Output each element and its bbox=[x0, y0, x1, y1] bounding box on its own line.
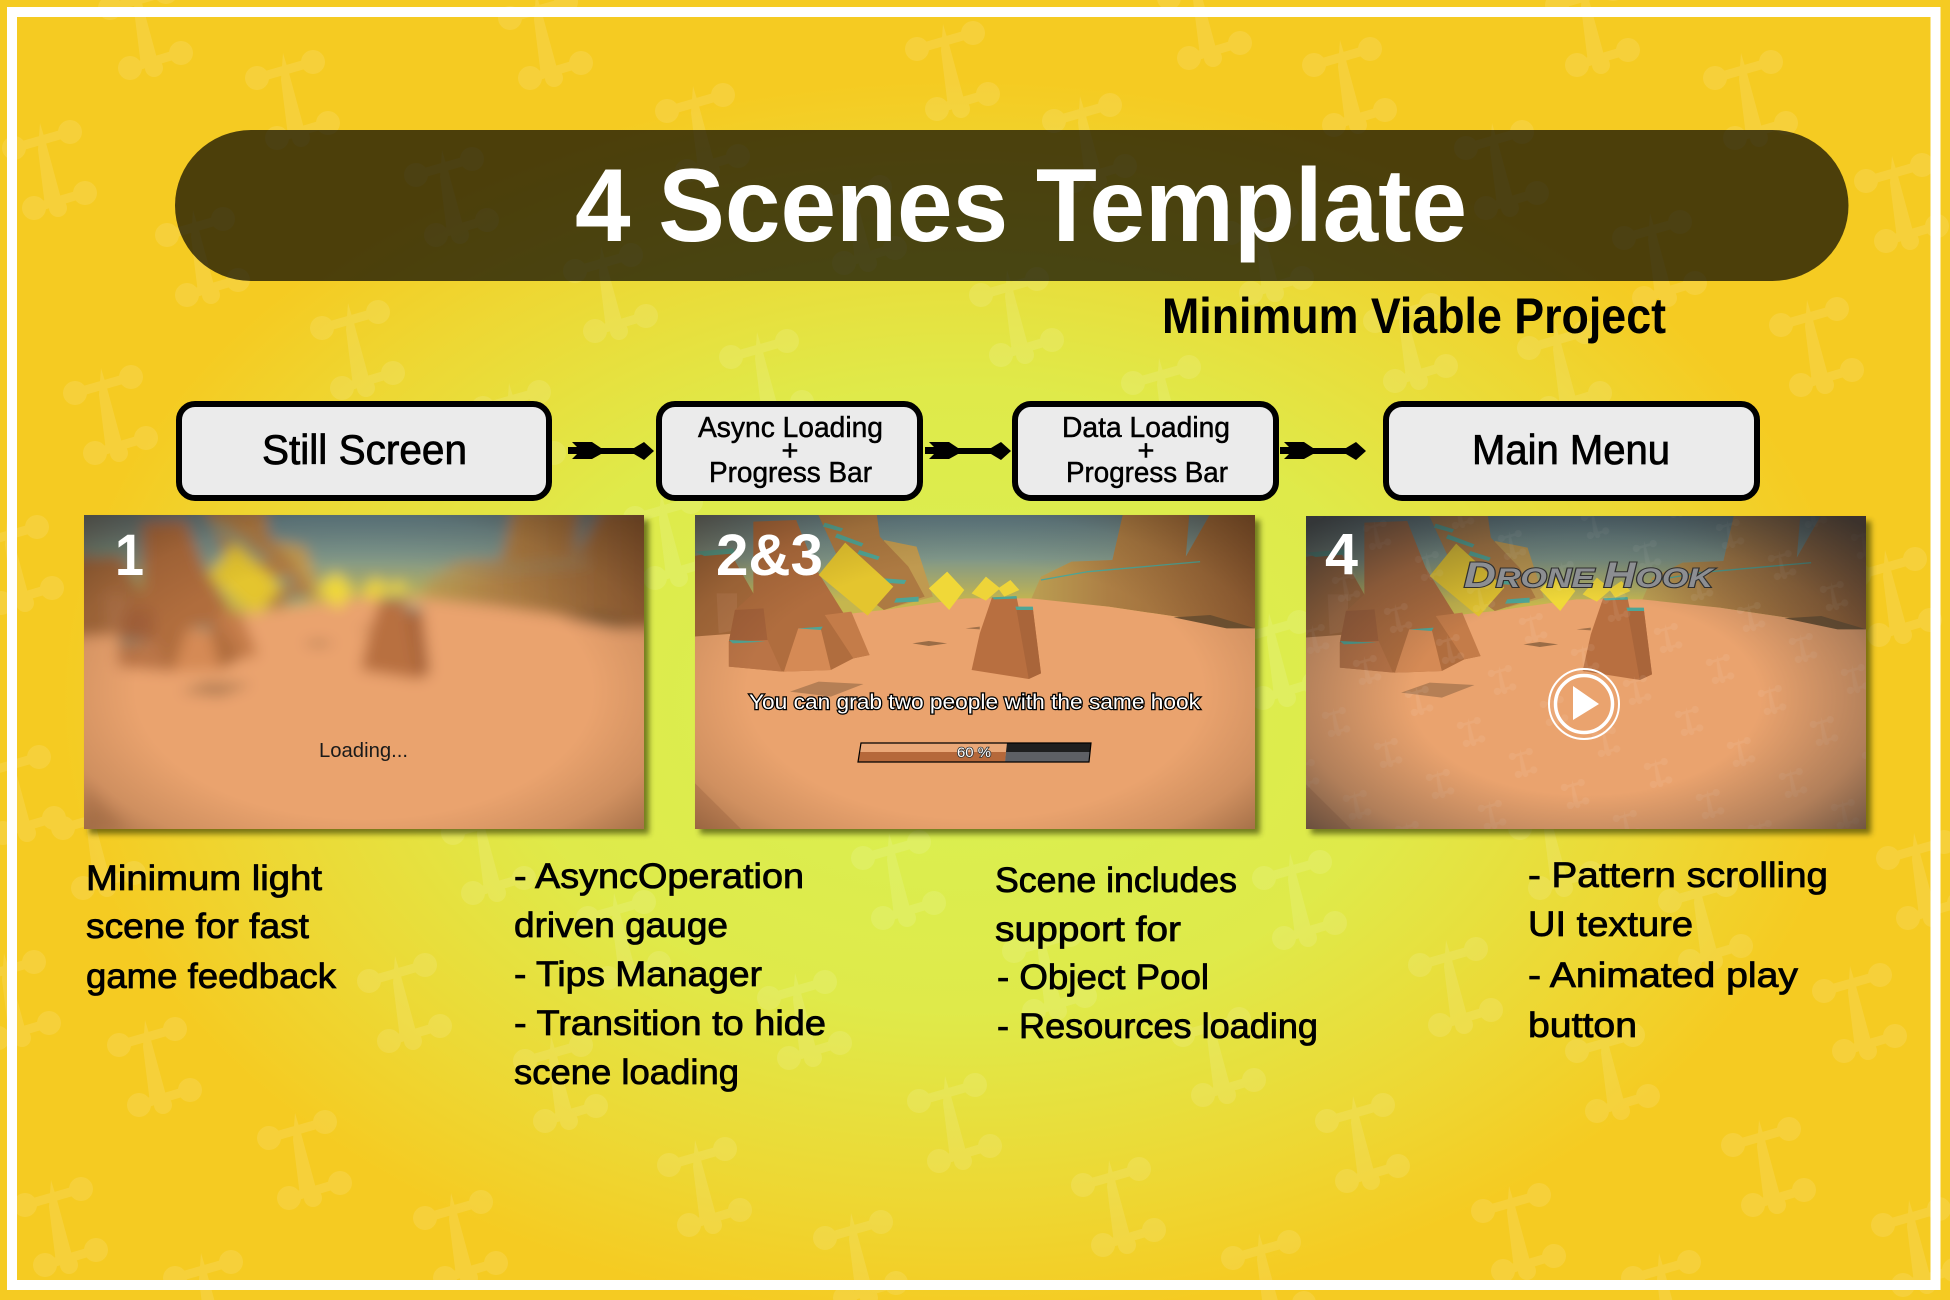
text block: scene 3 description: Scene includes bbox=[995, 861, 1237, 900]
step box: Async Loading + Progress Bar: Progress Bar bbox=[709, 457, 872, 489]
arrow 1 bbox=[568, 442, 654, 460]
title: 4 Scenes Template bbox=[575, 148, 1467, 264]
text block: scene 3 description: - Resources loading bbox=[997, 1007, 1318, 1046]
text block: scene 2 description bbox=[514, 857, 826, 1092]
text block: scene 1 description bbox=[86, 859, 337, 996]
arrow 3 bbox=[1280, 442, 1366, 460]
loading label: Loading... bbox=[319, 740, 408, 762]
panel: screenshot 1 still screen bbox=[84, 515, 653, 838]
step box: Async Loading + Progress Bar: Async Loading bbox=[698, 412, 883, 444]
text block: scene 3 description: - Object Pool bbox=[997, 958, 1209, 997]
text block: scene 2 description: - AsyncOperation bbox=[514, 857, 804, 896]
text block: scene 2 description: driven gauge bbox=[514, 906, 728, 945]
text block: scene 2 description: scene loading bbox=[514, 1053, 739, 1092]
title banner bbox=[175, 130, 1848, 281]
text block: scene 4 description: - Pattern scrolling bbox=[1528, 856, 1828, 895]
scene number 4: 4 bbox=[1325, 522, 1358, 587]
step box: Async Loading + Progress Bar bbox=[659, 404, 920, 498]
text block: scene 4 description: UI texture bbox=[1528, 905, 1693, 944]
step box: Data Loading + Progress Bar: Data Loading bbox=[1062, 412, 1230, 444]
text block: scene 2 description: - Tips Manager bbox=[514, 955, 762, 994]
icon: play button bbox=[1549, 669, 1619, 739]
tip text: You can grab two people with the same hook bbox=[749, 691, 1201, 714]
step box: Still Screen: Still Screen bbox=[262, 426, 467, 473]
progress bar: 60 % bbox=[957, 744, 991, 760]
step box: Data Loading + Progress Bar bbox=[1015, 404, 1276, 498]
text block: scene 4 description: - Animated play bbox=[1528, 956, 1799, 995]
scene number 1: 1 bbox=[115, 523, 144, 588]
text block: scene 1 description: game feedback bbox=[86, 957, 337, 996]
progress bar bbox=[858, 743, 1091, 762]
step box: Main Menu: Main Menu bbox=[1472, 426, 1670, 473]
text block: scene 3 description bbox=[995, 861, 1318, 1046]
panel: screenshot 4 main menu bbox=[1306, 516, 1876, 838]
step box: Main Menu bbox=[1386, 404, 1757, 498]
scene number 2&3: 2&3 bbox=[716, 523, 823, 588]
text block: scene 4 description: button bbox=[1528, 1006, 1637, 1045]
subtitle: Minimum Viable Project bbox=[1162, 288, 1666, 344]
step box: Data Loading + Progress Bar: Progress Bar bbox=[1066, 457, 1228, 489]
panel: screenshot 2 and 3 loading bbox=[695, 515, 1264, 838]
text block: scene 4 description bbox=[1528, 856, 1828, 1045]
step box: Data Loading + Progress Bar: + bbox=[1138, 435, 1154, 467]
game logo: DRONE HOOK bbox=[1464, 556, 1716, 595]
text block: scene 3 description: support for bbox=[995, 910, 1181, 949]
arrow 2 bbox=[925, 442, 1011, 460]
text block: scene 1 description: scene for fast bbox=[86, 907, 309, 946]
text block: scene 2 description: - Transition to hide bbox=[514, 1004, 826, 1043]
text block: scene 1 description: Minimum light bbox=[86, 859, 322, 898]
step box: Still Screen bbox=[179, 404, 549, 498]
step box: Async Loading + Progress Bar: + bbox=[782, 435, 798, 467]
